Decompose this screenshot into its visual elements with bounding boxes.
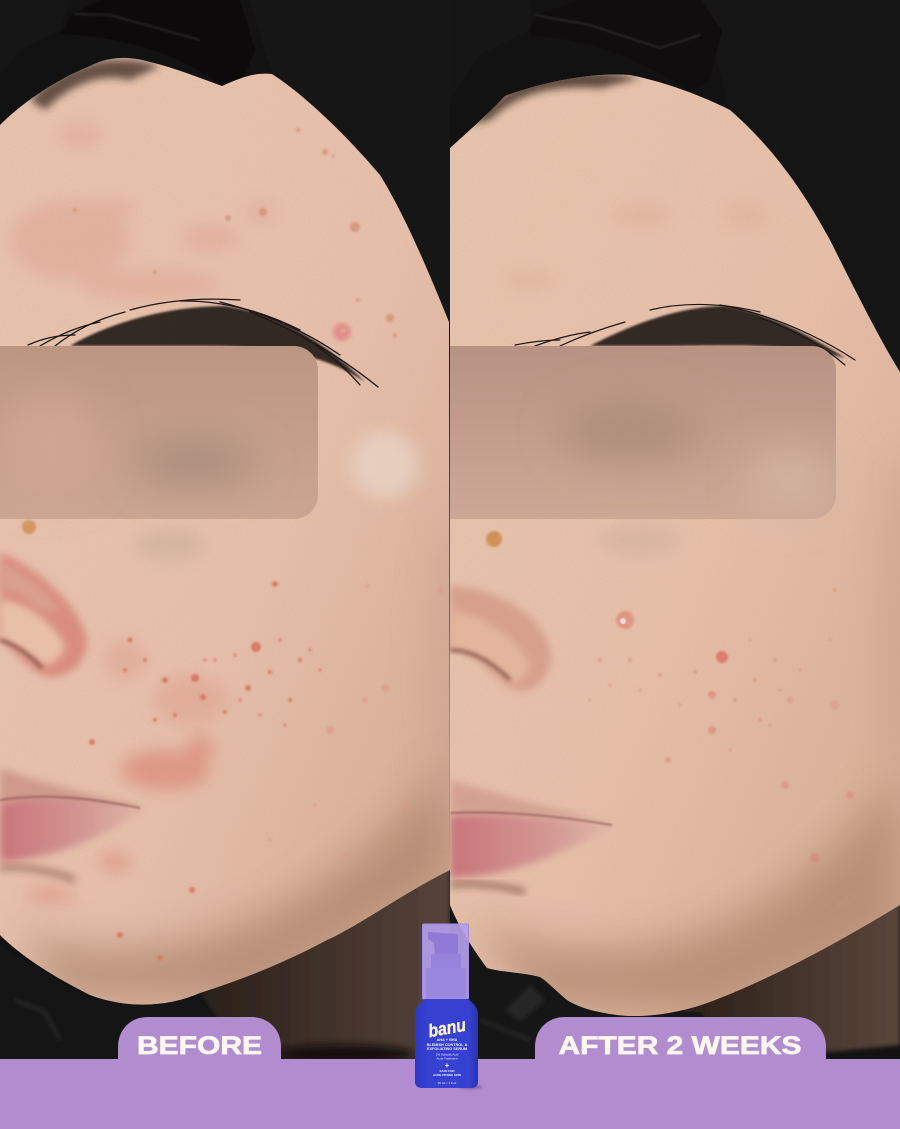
label tab: before <box>118 1017 281 1060</box>
product label text: 30 mL / 1 fl oz <box>438 1081 457 1085</box>
nose <box>0 552 87 677</box>
shading on jaw <box>20 760 450 1000</box>
pump <box>426 932 466 998</box>
label tab: after 2 weeks <box>535 1017 826 1060</box>
glare highlight <box>351 431 419 499</box>
logo: banu <box>427 1015 467 1041</box>
forehead redness <box>10 123 274 299</box>
right eyebrow <box>515 304 855 365</box>
face <box>0 58 450 1005</box>
label tab: before: BEFORE <box>137 1032 262 1060</box>
hairline <box>470 72 640 125</box>
black head wrap <box>60 2 254 85</box>
product label text: EXFOLIATING SERUM <box>427 1047 467 1051</box>
shading on jaw <box>470 770 900 1015</box>
blur bar <box>0 346 318 519</box>
bottle shadow <box>458 1084 482 1090</box>
bottle body <box>415 999 478 1088</box>
neck shadow <box>200 860 450 1060</box>
photo panel: after <box>420 0 900 1060</box>
product label text: SAFE FOR <box>439 1069 455 1073</box>
mouth <box>0 768 145 880</box>
acne spots <box>89 581 322 960</box>
neck shadow <box>682 905 900 1054</box>
product label text: ACNE-PRONE SKIN <box>433 1073 461 1077</box>
forehead speckles <box>73 128 397 337</box>
nose <box>450 585 551 691</box>
freckle <box>22 520 36 534</box>
hairline <box>30 60 160 110</box>
bottom purple band <box>0 1059 900 1129</box>
product bottle <box>415 924 482 1090</box>
blur bar <box>420 346 836 519</box>
label tab: after 2 weeks: AFTER 2 WEEKS <box>558 1032 802 1060</box>
cheek redness <box>26 640 226 901</box>
product label text: Acne Treatment <box>436 1056 458 1060</box>
product label text: AHA + BHA <box>437 1038 458 1042</box>
acne spots <box>616 611 854 863</box>
forehead redness <box>522 211 750 284</box>
pimple near brow <box>333 323 351 341</box>
product label text: 2% Salicylic Acid <box>436 1052 459 1056</box>
black head wrap <box>536 14 700 49</box>
product label text <box>427 1038 468 1085</box>
product label text: + <box>445 1061 450 1070</box>
face <box>450 74 900 1016</box>
freckle <box>486 531 502 547</box>
lower collar <box>15 998 62 1040</box>
lower collar <box>480 986 704 1042</box>
photo panel: before <box>0 0 477 1063</box>
mouth <box>450 780 615 892</box>
clear cap <box>422 924 468 999</box>
left eyebrow <box>28 299 378 387</box>
product label text: BLEMISH CONTROL & <box>427 1043 468 1047</box>
